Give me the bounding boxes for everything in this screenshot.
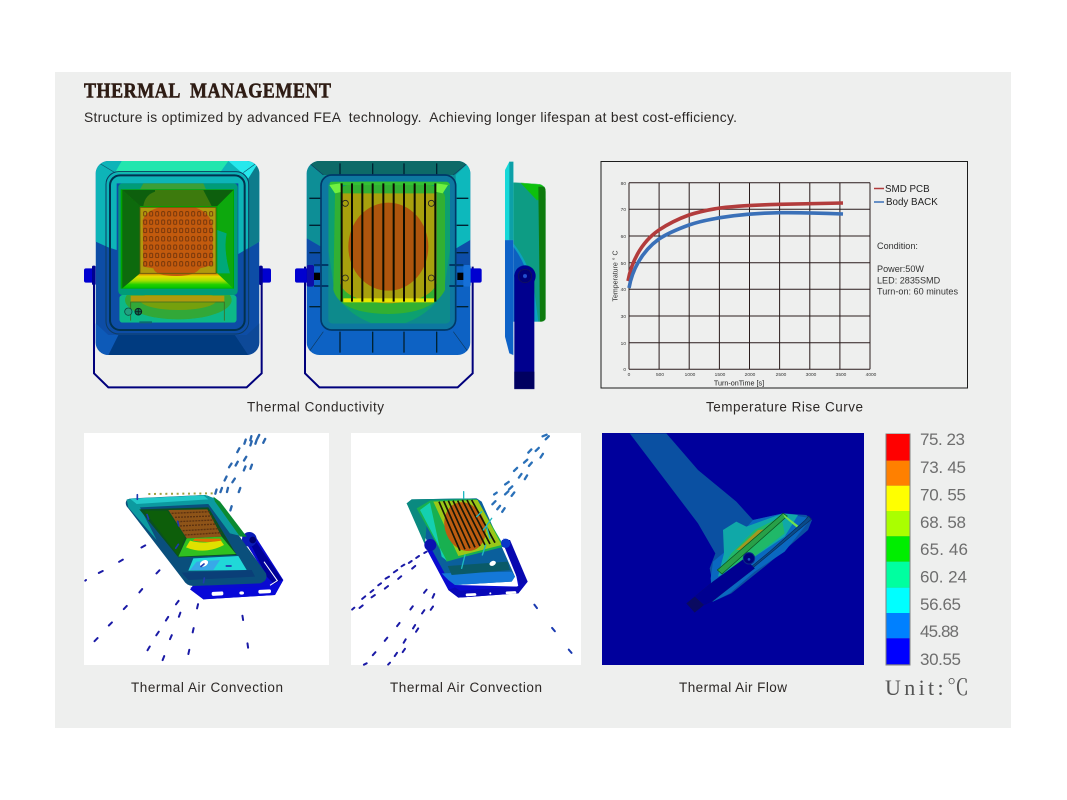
colour scale labels: 75. 23 [920, 430, 965, 449]
colour scale labels: 30.55 [920, 650, 961, 669]
colour scale labels: 60. 24 [920, 568, 967, 586]
warm air near lamp [711, 513, 811, 602]
grid [629, 183, 870, 369]
test conditions: LED: 2835SMD [877, 276, 941, 286]
airflow arrows: intake [352, 552, 436, 665]
unit label: Unit:℃ [885, 675, 969, 700]
airflow arrows: exhaust [492, 433, 551, 513]
airflow arrows: outlet lower right [533, 603, 573, 655]
warm air plume [630, 433, 812, 602]
colour scale labels: 70. 55 [920, 486, 966, 504]
y axis tick labels: 30 [621, 314, 626, 320]
test conditions: Condition: [877, 241, 918, 251]
lamp isometric back [407, 496, 528, 598]
colour scale labels [920, 430, 968, 669]
x axis tick labels: 3500 [836, 372, 847, 378]
caption: Temperature Rise Curve [706, 400, 863, 414]
caption: Thermal Conductivity [247, 400, 384, 414]
diagram: front view lamp thermal map [84, 161, 271, 387]
axis title: x: Turn-onTime [s] [714, 378, 764, 388]
y axis tick labels: 80 [621, 181, 626, 187]
x axis tick labels [628, 372, 877, 378]
panel: background [55, 72, 1011, 728]
lamp cross-section [686, 513, 811, 613]
test conditions: Turn-on: 60 minutes [877, 286, 958, 296]
driver compartment [119, 295, 237, 324]
x axis tick labels: 2500 [776, 372, 787, 378]
y axis tick labels: 10 [621, 341, 626, 347]
bracket [94, 267, 262, 387]
hot zone above lamp [718, 513, 798, 577]
heat sink fins [342, 183, 435, 302]
lamp body [96, 161, 259, 355]
temperature colour scale [886, 434, 910, 666]
legend: SMD PCB: SMD PCB [885, 184, 930, 195]
y axis tick labels: 60 [621, 234, 626, 240]
test conditions: Power:50W [877, 264, 924, 274]
LED board with hot spot [140, 207, 216, 276]
infographic: thermal management [55, 72, 1011, 728]
curve: Body BACK [629, 213, 843, 288]
airflow arrows over lamp [137, 493, 235, 584]
y axis tick labels: 50 [621, 261, 626, 267]
bezel rings [106, 172, 249, 334]
knobs [295, 265, 482, 287]
y axis tick labels: 70 [621, 207, 626, 213]
lamp body [307, 161, 470, 355]
colour scale labels: 68. 58 [920, 513, 966, 532]
y axis tick labels: 0 [623, 367, 626, 373]
panel: air convection front [84, 433, 329, 665]
x axis tick labels: 4000 [866, 372, 877, 378]
caption: Thermal Air Flow [679, 680, 787, 695]
colour scale labels: 45.88 [920, 622, 959, 641]
diagram: back view lamp thermal map [295, 161, 547, 389]
chart: temperature rise curve [601, 162, 968, 388]
side view lamp [505, 162, 547, 389]
knobs [84, 266, 271, 285]
caption: Thermal Air Convection [131, 680, 283, 695]
chart frame [601, 162, 968, 388]
axis title: y: Temperature ° C [612, 250, 620, 302]
airflow arrows: exhaust [215, 433, 266, 512]
panel: air flow cross-section [602, 433, 864, 665]
subtitle text: Structure is optimized by advanced FEA technology. Achieving longer lifespan at best cost-efficiency. [84, 110, 737, 125]
airflow arrows: intake [84, 544, 248, 662]
panel: air convection back [351, 433, 581, 665]
x axis tick labels: 3000 [806, 372, 817, 378]
title: THERMAL MANAGEMENT [84, 79, 331, 103]
legend: Body BACK: Body BACK [886, 197, 938, 208]
test conditions [877, 241, 958, 296]
y axis tick labels [621, 181, 626, 373]
x axis tick labels: 2000 [745, 372, 756, 378]
bezel ring [321, 175, 456, 330]
colour scale labels: 65. 46 [920, 540, 968, 559]
curve: SMD PCB [628, 203, 843, 281]
x axis tick labels: 1000 [685, 372, 696, 378]
optical window [118, 183, 238, 295]
colour scale labels: 73. 45 [920, 458, 966, 477]
lamp isometric front [126, 493, 283, 599]
caption: Thermal Air Convection [390, 680, 542, 695]
x axis tick labels: 500 [656, 372, 664, 378]
heat map back cover [328, 178, 450, 328]
x axis tick labels: 1500 [715, 372, 726, 378]
x axis tick labels: 0 [628, 372, 631, 378]
y axis tick labels: 40 [621, 287, 626, 293]
screw holes [342, 200, 434, 281]
colour scale labels: 56.65 [920, 595, 961, 614]
bracket [305, 267, 473, 387]
airflow arrows over lamp [462, 492, 492, 568]
